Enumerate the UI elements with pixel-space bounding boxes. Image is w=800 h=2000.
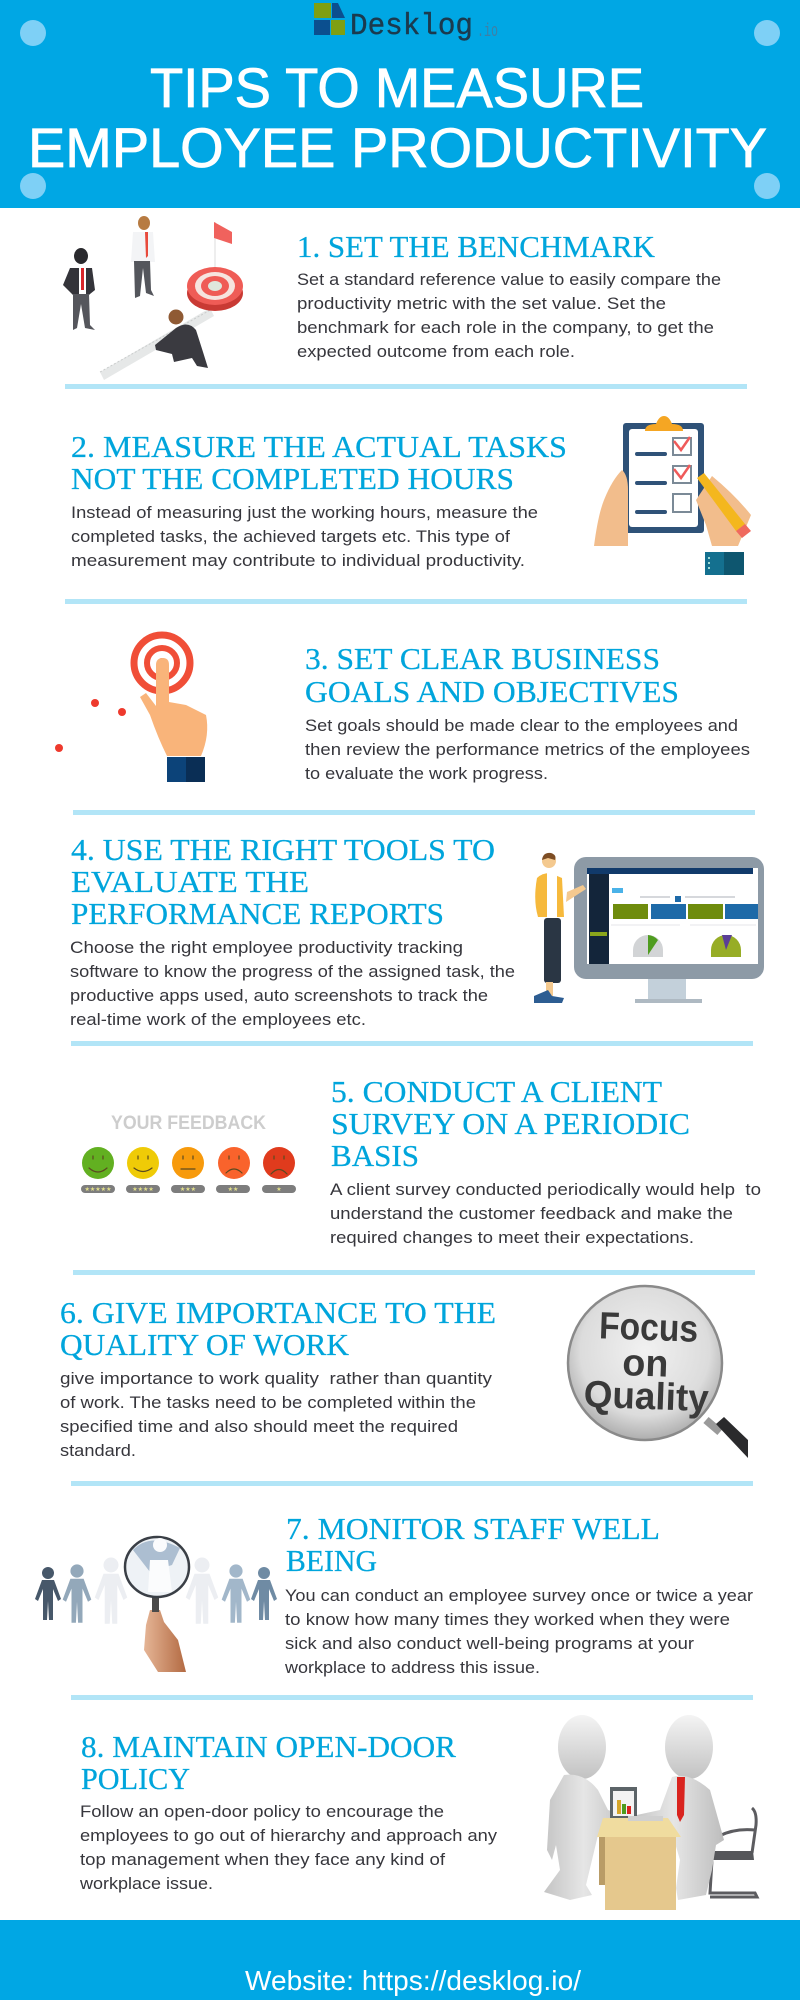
text block: benchmark for each role in the company, to get the xyxy=(297,319,714,337)
heading xyxy=(286,1511,660,1578)
text block: specified time and also should meet the required xyxy=(60,1418,458,1436)
panel: tip 2 measure the actual tasks xyxy=(71,416,751,575)
text block: required changes to meet their expectations. xyxy=(330,1229,694,1247)
heading: 2. MEASURE THE ACTUAL TASKS xyxy=(71,429,567,464)
text block: Set goals should be made clear to the employees and xyxy=(305,717,738,735)
text block: expected outcome from each role. xyxy=(297,343,575,361)
icon: feedback smiley faces: ★★★ xyxy=(180,1186,196,1193)
heading: 7. MONITOR STAFF WELL xyxy=(286,1511,660,1546)
text block: of work. The tasks need to be completed within the xyxy=(60,1394,476,1412)
heading: 6. GIVE IMPORTANCE TO THE xyxy=(60,1295,496,1330)
text block xyxy=(70,939,515,1029)
heading: 8. MAINTAIN OPEN-DOOR xyxy=(81,1729,456,1764)
heading xyxy=(331,1074,690,1173)
text block xyxy=(330,1181,761,1247)
icon: clipboard checklist with hands xyxy=(594,416,751,575)
text block xyxy=(297,271,721,361)
heading xyxy=(305,641,679,709)
heading: EVALUATE THE xyxy=(71,864,309,899)
icon: feedback smiley faces xyxy=(81,1113,296,1193)
heading xyxy=(71,832,495,931)
heading: 4. USE THE RIGHT TOOLS TO xyxy=(71,832,495,867)
icon: feedback smiley faces: ★★★★ xyxy=(132,1186,154,1193)
icon: magnifier focus on quality: on xyxy=(622,1342,669,1386)
text block: Follow an open-door policy to encourage the xyxy=(80,1803,444,1821)
text block xyxy=(71,504,538,570)
text block xyxy=(284,1587,754,1677)
heading: POLICY xyxy=(81,1761,190,1796)
title: TIPS TO MEASURE xyxy=(150,56,644,119)
icon: feedback smiley faces: YOUR FEEDBACK xyxy=(111,1113,266,1134)
panel: tip 5 conduct a client survey xyxy=(81,1074,761,1247)
icon: feedback smiley faces: ★ xyxy=(276,1186,282,1193)
icon: feedback smiley faces: ★★★★★ xyxy=(85,1186,111,1193)
panel: tip 3 set clear business goals xyxy=(55,635,750,783)
heading: NOT THE COMPLETED HOURS xyxy=(71,461,514,496)
panel: tip 7 monitor staff well being xyxy=(35,1511,754,1677)
text block: completed tasks, the achieved targets etc. This type of xyxy=(71,528,510,546)
text block: to evaluate the work progress. xyxy=(305,765,548,783)
panel: tip 1 set the benchmark xyxy=(63,216,721,380)
heading: GOALS AND OBJECTIVES xyxy=(305,674,679,709)
heading: SURVEY ON A PERIODIC xyxy=(331,1106,690,1141)
icon: business people and target xyxy=(63,216,243,380)
text block: A client survey conducted periodically would help to xyxy=(330,1181,761,1199)
text block: measurement may contribute to individual productivity. xyxy=(71,552,525,570)
text block: productive apps used, auto screenshots to track the xyxy=(70,987,488,1005)
text block: to know how many times they worked when they were xyxy=(285,1611,730,1629)
text block: workplace to address this issue. xyxy=(284,1659,540,1677)
icon: feedback smiley faces: ★★ xyxy=(228,1186,238,1193)
title xyxy=(28,56,767,179)
icon: magnifier focus on quality: Quality xyxy=(583,1374,709,1420)
icon: hand pressing target xyxy=(55,635,207,782)
icon: two figures shaking hands over desk xyxy=(544,1715,757,1910)
text block xyxy=(60,1370,493,1460)
text block: Instead of measuring just the working hours, measure the xyxy=(71,504,538,522)
text block: software to know the progress of the assigned task, the xyxy=(70,963,515,981)
text block xyxy=(305,717,750,783)
panel: tip 8 open-door policy xyxy=(79,1715,757,1910)
heading: PERFORMANCE REPORTS xyxy=(71,896,444,931)
heading xyxy=(71,429,567,496)
text block: productivity metric with the set value. Set the xyxy=(297,295,666,313)
title: EMPLOYEE PRODUCTIVITY xyxy=(28,116,767,179)
icon: man presenting monitor dashboard xyxy=(534,853,764,1003)
heading: 1. SET THE BENCHMARK xyxy=(297,229,656,264)
panel: tip 4 use the right tools xyxy=(70,832,764,1029)
text block: employees to go out of hierarchy and approach any xyxy=(80,1827,498,1845)
text block: real-time work of the employees etc. xyxy=(70,1011,366,1029)
text block: You can conduct an employee survey once or twice a year xyxy=(285,1587,754,1605)
logo: Desklog.io: Desklog xyxy=(350,9,473,44)
icon: magnifier focus on quality: Focus xyxy=(598,1305,699,1351)
heading xyxy=(60,1295,496,1362)
heading: BASIS xyxy=(331,1138,419,1173)
heading: BEING xyxy=(286,1543,377,1578)
panel: tip 6 quality of work xyxy=(60,1286,748,1460)
text block: standard. xyxy=(60,1442,136,1460)
text block: give importance to work quality rather than quantity xyxy=(60,1370,493,1388)
header banner xyxy=(0,0,800,208)
text block xyxy=(79,1803,498,1893)
icon: magnifier over staff figures xyxy=(35,1537,277,1672)
text block: then review the performance metrics of the employees xyxy=(305,741,750,759)
logo: Desklog.io: .io xyxy=(477,22,498,42)
logo: Desklog.io xyxy=(314,3,498,44)
text block: sick and also conduct well-being programs at your xyxy=(285,1635,695,1653)
website link text: Website: https://desklog.io/ xyxy=(245,1965,581,1996)
heading: QUALITY OF WORK xyxy=(60,1327,350,1362)
text block: Choose the right employee productivity tracking xyxy=(70,939,463,957)
heading: 5. CONDUCT A CLIENT xyxy=(331,1074,662,1109)
text block: understand the customer feedback and make the xyxy=(330,1205,733,1223)
heading xyxy=(81,1729,456,1796)
icon: magnifier focus on quality xyxy=(568,1286,748,1458)
heading: 3. SET CLEAR BUSINESS xyxy=(305,641,660,676)
footer banner xyxy=(0,1920,800,2000)
text block: top management when they face any kind of xyxy=(80,1851,445,1869)
text block: workplace issue. xyxy=(79,1875,213,1893)
text block: Set a standard reference value to easily compare the xyxy=(297,271,721,289)
